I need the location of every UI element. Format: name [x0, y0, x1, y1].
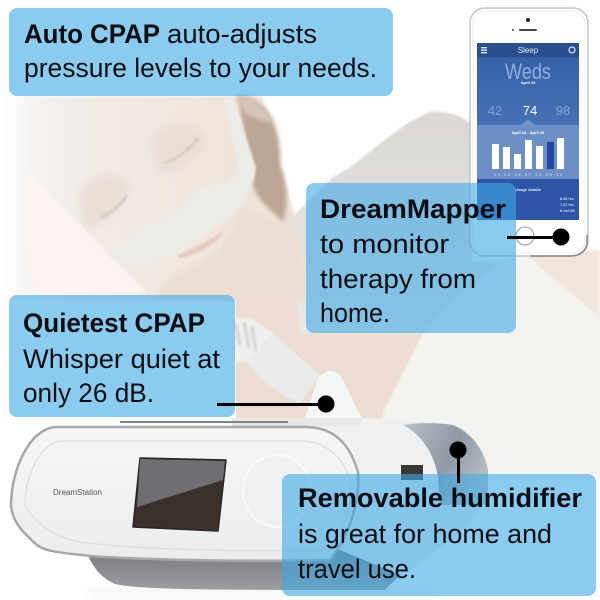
eyelids	[150, 124, 208, 172]
phone screen	[477, 43, 579, 220]
shirt	[287, 112, 507, 333]
callout: DreamMapper: therapy from	[320, 264, 476, 294]
hair	[238, 96, 286, 222]
pointer: quiet motor	[217, 396, 334, 412]
main body	[11, 427, 358, 561]
callout: Auto CPAP: auto-adjusts	[167, 19, 317, 49]
phone screen: April 24 - April 30	[512, 130, 545, 135]
brand label: DreamStation	[53, 488, 102, 497]
callout: Removable humidifier: travel use.	[298, 554, 416, 584]
callout: Quietest CPAP: Whisper quiet at	[23, 344, 221, 374]
callout: Removable humidifier	[282, 474, 596, 596]
pillow	[25, 168, 147, 295]
callout: Auto CPAP	[9, 8, 393, 96]
neck shade	[150, 205, 306, 300]
humidifier	[300, 418, 488, 590]
pointer: phone	[507, 228, 570, 246]
phone screen: 98	[556, 103, 570, 118]
air port	[401, 465, 423, 480]
callout: DreamMapper: home.	[320, 298, 390, 328]
shadow under device	[90, 590, 430, 598]
base	[88, 550, 400, 590]
callout: Auto CPAP: Auto CPAP	[24, 19, 160, 49]
nasal mask cushion	[108, 97, 256, 265]
hose	[234, 318, 362, 418]
phone screen: 8:46 hrs	[560, 197, 574, 201]
phone screen: Usage details	[515, 187, 542, 192]
callout: Quietest CPAP	[9, 295, 235, 417]
callout: DreamMapper	[306, 183, 516, 333]
callout: Removable humidifier: Removable humidifier	[298, 483, 582, 513]
face skin	[0, 96, 306, 300]
top ledge	[232, 418, 362, 426]
callout: DreamMapper: to monitor	[320, 229, 449, 259]
phone screen: 7:22 hrs	[560, 203, 574, 207]
display screen	[133, 458, 226, 531]
callout: DreamMapper: DreamMapper	[320, 194, 507, 224]
callout: Removable humidifier: is great for home and	[298, 519, 552, 549]
callout: Auto CPAP: pressure levels to your needs.	[24, 53, 377, 83]
phone screen: 8 cmH20	[560, 209, 575, 213]
phone: DreamMapper app	[470, 8, 588, 256]
usage bar chart: 24 25 26 27 28 29 30	[494, 173, 562, 177]
callout: Quietest CPAP: only 26 dB.	[23, 378, 154, 408]
usage bar chart	[492, 138, 564, 177]
phone screen: Weds	[505, 59, 551, 84]
dial	[243, 455, 311, 527]
phone screen: 74	[523, 103, 537, 118]
callout: Quietest CPAP: Quietest CPAP	[23, 308, 205, 338]
phone screen: 42	[488, 103, 502, 118]
phone screen: Sleep	[518, 46, 539, 55]
white garment	[383, 258, 600, 480]
pointer: humidifier	[450, 442, 466, 483]
CPAP device: DreamStation	[11, 318, 488, 598]
phone screen: April 29	[521, 80, 536, 85]
